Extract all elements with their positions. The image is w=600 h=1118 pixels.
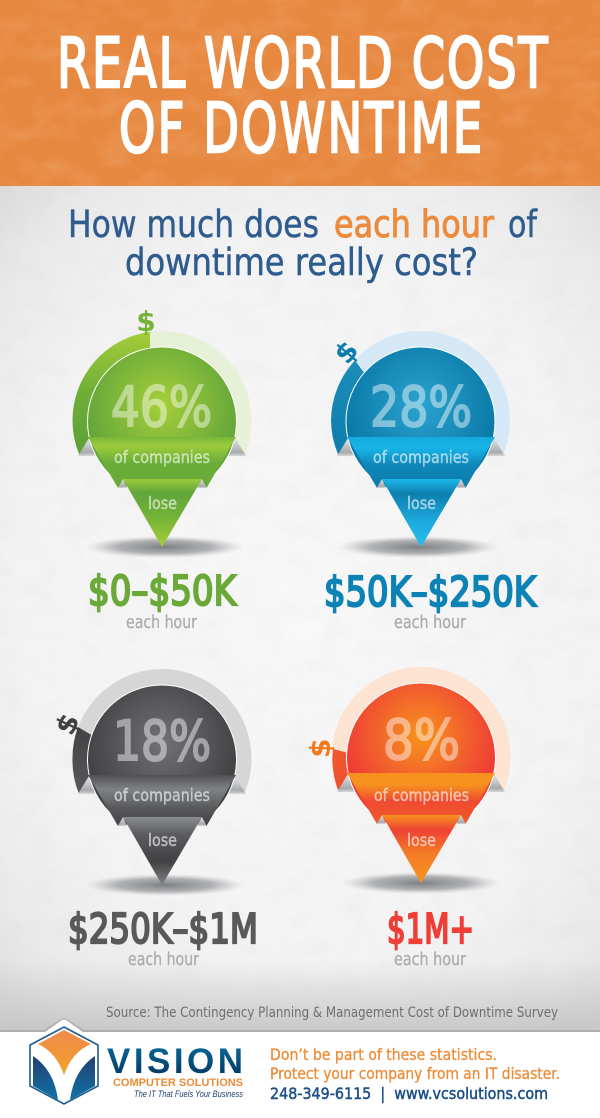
call to action xyxy=(270,1045,560,1103)
logo hexagon xyxy=(30,1027,98,1104)
panel: 8% pin xyxy=(304,667,510,970)
panel: 28% pin xyxy=(324,331,537,633)
percent: 28% xyxy=(370,375,472,439)
title: REAL WORLD COST xyxy=(57,23,548,103)
of companies: of companies xyxy=(114,786,210,806)
lose: lose xyxy=(407,831,436,851)
call to action: Don’t be part of these statistics. xyxy=(270,1045,497,1064)
footer band xyxy=(0,1018,600,1118)
amount: $1M+ xyxy=(387,905,474,953)
each hour: each hour xyxy=(394,612,466,633)
call to action: 248-349-6115 | www.vcsolutions.com xyxy=(270,1084,548,1103)
amount: $250K–$1M xyxy=(68,905,258,953)
question heading xyxy=(68,203,538,284)
amount: $0–$50K xyxy=(88,567,237,615)
dollar icon: $ xyxy=(136,305,156,338)
lose: lose xyxy=(407,494,436,514)
each hour: each hour xyxy=(126,612,197,633)
question heading: downtime really cost? xyxy=(125,241,478,284)
pin graphic blue xyxy=(331,331,510,558)
of companies: of companies xyxy=(374,786,469,806)
title: OF DOWNTIME xyxy=(119,87,482,168)
panel: 46% pin xyxy=(72,305,251,633)
of companies: of companies xyxy=(114,448,210,468)
dollar icon: $ xyxy=(327,334,365,370)
logo wordmark: COMPUTER SOLUTIONS xyxy=(113,1077,243,1089)
title xyxy=(57,23,548,168)
question heading: each hour xyxy=(334,203,495,246)
lose: lose xyxy=(148,831,177,851)
each hour: each hour xyxy=(394,949,466,970)
amount: $50K–$250K xyxy=(324,568,537,616)
each hour: each hour xyxy=(128,949,199,970)
logo wordmark: VISION xyxy=(107,1042,243,1081)
question heading: of xyxy=(508,203,538,246)
dollar icon: $ xyxy=(48,708,87,740)
pin graphic green xyxy=(72,331,251,558)
pin graphic grey xyxy=(72,669,252,896)
percent: 18% xyxy=(113,709,211,773)
percent: 46% xyxy=(111,375,212,439)
lose: lose xyxy=(148,494,177,514)
dollar icon: $ xyxy=(304,738,337,758)
header banner xyxy=(0,0,600,186)
logo wordmark xyxy=(107,1042,243,1100)
of companies: of companies xyxy=(373,448,469,468)
pin graphic orange xyxy=(332,667,510,894)
question heading: How much does xyxy=(68,203,319,246)
call to action: Protect your company from an IT disaster. xyxy=(270,1064,560,1083)
logo wordmark: The IT That Fuels Your Business xyxy=(134,1089,243,1100)
panel: 18% pin xyxy=(48,669,258,970)
percent: 8% xyxy=(383,708,460,772)
